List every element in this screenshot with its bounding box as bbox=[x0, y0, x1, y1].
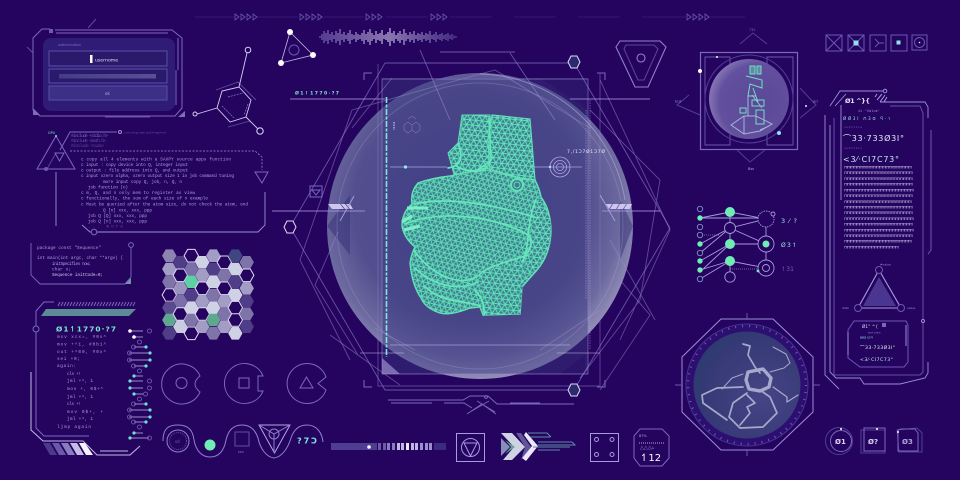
right data panel: it 'Value' bbox=[858, 109, 880, 114]
square bbox=[235, 432, 249, 446]
icon: circle with notch and square bbox=[224, 364, 263, 404]
heart body bbox=[402, 168, 551, 315]
triangle diagram bbox=[842, 262, 915, 312]
paragraph lines: mmmmmmmmmmmmmmmmmmmmmmm bbox=[844, 177, 913, 182]
hexagon node: left bbox=[284, 221, 296, 233]
heading labels: Ø1↿1770·?7 bbox=[295, 90, 339, 96]
bottom-right badge: 03: Ø3 bbox=[902, 438, 913, 446]
central holographic sphere: 7,/1Ɔ7Ø1Ɔ7Ø bbox=[567, 148, 605, 155]
assembly panel: ljmp again bbox=[57, 425, 91, 430]
code panel: c m, Q, and n only mem to register as view bbox=[81, 191, 195, 196]
bottom wave toolbar: ccc bbox=[238, 450, 244, 454]
login row: username: usernɑme bbox=[95, 58, 118, 64]
small triangle box bbox=[310, 186, 322, 197]
top arrow rows bbox=[195, 14, 745, 20]
code panel: job Q [n] xxx, xxx, ppp bbox=[88, 220, 147, 224]
direction labels bbox=[675, 28, 818, 171]
assembly panel: again: bbox=[57, 364, 76, 369]
paragraph lines: mmmmmmmmmmmmmmmmmmmmmmm bbox=[844, 171, 913, 176]
status card: △△△▵ bbox=[640, 445, 655, 451]
paragraph lines bbox=[844, 166, 914, 250]
code panel: more input copy Q, job, n, Q, n bbox=[103, 180, 182, 185]
assembly panel: mov +, 0$+^ bbox=[67, 387, 103, 392]
icon: four circle box bbox=[590, 434, 618, 462]
hexagon node: top right bbox=[568, 56, 580, 68]
status card bbox=[634, 429, 669, 466]
specimen model bbox=[731, 66, 772, 134]
assembly panel: jml +^, 1 bbox=[67, 417, 93, 422]
code panel: GPU bbox=[48, 131, 56, 135]
code panel: c Must be queried after the atom size, do not check the atom, end bbox=[81, 202, 248, 208]
axis lines bbox=[272, 99, 660, 211]
slider bar bbox=[331, 443, 446, 450]
right data panel: ØØ3I ᕬ3ᕮ ꟼ·↿ bbox=[843, 116, 891, 121]
code panel: #include <stdio.h> bbox=[71, 134, 108, 139]
vessels bbox=[448, 115, 492, 178]
login row: username bbox=[49, 51, 167, 66]
bottom-right badge: 02 bbox=[861, 428, 885, 453]
mini panel: text value bbox=[868, 330, 881, 334]
dna strand bbox=[128, 329, 152, 440]
login row: password bbox=[49, 69, 167, 83]
small code panel: package const "Sequence" bbox=[37, 246, 101, 251]
mini panel: Ø1° ^{ bbox=[862, 324, 878, 329]
small code panel: int main(int argc, char **argv) { bbox=[37, 256, 123, 261]
paragraph lines: mmmmmmmmmmmmmmmmmmmmmmm bbox=[844, 206, 913, 210]
assembly panel: sei +0; bbox=[57, 357, 80, 362]
small code panel: char x; bbox=[52, 268, 71, 272]
right hatch bbox=[606, 204, 632, 209]
sphere specimen widget bbox=[675, 28, 818, 171]
small code panel bbox=[31, 243, 133, 284]
chevron arrows bbox=[501, 432, 575, 461]
neural network bbox=[697, 206, 797, 282]
assembly panel: mov 0$+, + bbox=[67, 410, 103, 415]
neural network: ↿31 bbox=[781, 266, 794, 273]
bottom-right badge: 01: Ø1 bbox=[835, 438, 846, 446]
bottom-right badge: 03 bbox=[897, 428, 922, 452]
paragraph lines: mmmmmmmmmmmmmmmmmmmmmmm bbox=[844, 200, 912, 205]
right data panel bbox=[825, 89, 931, 389]
heading: Ø1↿1770·?7 bbox=[56, 324, 116, 334]
target rings bbox=[550, 157, 570, 177]
code panel: Q [n] xxx, xxx, ppp bbox=[103, 208, 152, 214]
top-right icon row bbox=[826, 35, 927, 51]
hexagon node: bottom right bbox=[568, 384, 580, 396]
small code panel: Sequence initCode=0; bbox=[52, 273, 103, 278]
teal header bar bbox=[41, 309, 136, 316]
paragraph lines: mmmmmmmmmmmmmmmmmmmmmmm bbox=[844, 166, 912, 170]
code panel: #include <cuda> bbox=[71, 144, 104, 149]
wireframe polygons bbox=[290, 50, 670, 390]
code panel bbox=[37, 130, 268, 235]
assembly panel: jml +^, 1 bbox=[67, 395, 93, 400]
mint dot bbox=[204, 440, 216, 450]
paragraph lines: mmmmmmmmmmmmmmmmmmmmmmm bbox=[844, 188, 914, 194]
status card: ↿12 bbox=[640, 453, 661, 464]
code panel: c output : file address into Q, and output bbox=[81, 168, 188, 174]
code panel: including new and fragment bbox=[124, 130, 167, 134]
code panel: ... more bbox=[88, 224, 123, 230]
corner brackets bbox=[364, 73, 605, 387]
stripe corner bbox=[43, 443, 93, 455]
shield triangle bbox=[259, 425, 290, 453]
right data panel: subtitle bbox=[844, 146, 862, 150]
waveform bbox=[320, 28, 456, 46]
right data panel: <3⁄·CI7C73° bbox=[843, 155, 899, 164]
icon: triangle in square bbox=[456, 434, 484, 462]
right data panel: subtitle bbox=[844, 125, 862, 129]
code panel: c input : copy device into Q, integer input bbox=[81, 163, 188, 168]
direction labels: pcl bbox=[813, 100, 818, 104]
mini panel bbox=[848, 321, 908, 367]
neural network: 3⁄? bbox=[781, 217, 797, 225]
icon: circle with notch and triangle bbox=[287, 363, 326, 404]
mini panel: <3⁄·CI7C73° bbox=[860, 357, 893, 363]
label: ?7Ɔ bbox=[297, 436, 317, 446]
dial: sd bbox=[175, 439, 180, 444]
login panel bbox=[27, 19, 185, 117]
paragraph lines: mmmmmmmmmmmmmmmmmmmmmmm bbox=[844, 228, 914, 234]
sphere body bbox=[327, 73, 633, 379]
heart wireframe bbox=[402, 115, 551, 315]
paragraph lines: mmmmmmmmmmmmmmmmmm bbox=[844, 246, 899, 250]
left hatch bbox=[328, 204, 353, 209]
paragraph lines: mmmmmmmmmmmmmmmmmmmmmmm bbox=[844, 234, 913, 239]
paragraph lines: mmmmmmmmmmmmmmmmmmmmmmm bbox=[844, 194, 913, 199]
assembly panel bbox=[31, 302, 140, 455]
triangle diagram: data bbox=[842, 306, 849, 310]
login panel: authentication bbox=[58, 43, 81, 47]
icon: circle with notch and circle bbox=[162, 364, 200, 404]
screen rectangle bbox=[382, 78, 588, 374]
right data panel: ⌒33·733Ø3I° bbox=[843, 133, 904, 143]
login row: button: ok bbox=[105, 91, 110, 96]
code panel: c functionally, the sum of each size of n example bbox=[81, 196, 208, 202]
code panel: c copy all 4 elements with a SAXPY source apps function bbox=[81, 158, 231, 162]
login row: button bbox=[49, 86, 167, 100]
starfish bbox=[702, 344, 798, 428]
assembly panel: out +^00, #0x^ bbox=[57, 350, 106, 355]
triangle node icon bbox=[278, 29, 316, 66]
assembly panel: cls +! bbox=[67, 372, 81, 377]
status card: 87% bbox=[639, 434, 647, 438]
paragraph lines: mmmmmmmmmmmmmmmmmmmmmmm bbox=[844, 211, 913, 216]
neural network: Ø3↿ bbox=[781, 242, 797, 249]
triangle emblem bbox=[37, 135, 75, 170]
panel header: Ø1 ^}{ bbox=[845, 97, 870, 105]
assembly panel: jml +^, 1 bbox=[67, 379, 93, 384]
assembly panel: mov xcx=, #0x^ bbox=[57, 335, 106, 340]
triangle diagram: #value bbox=[880, 262, 891, 266]
code panel: #include <math.h> bbox=[71, 139, 106, 144]
bottom-right badge: 01 bbox=[826, 428, 852, 454]
code panel: c input xzero alpha, xzero output size 1 in job command tuning bbox=[81, 174, 234, 179]
tri-shape emblem bbox=[616, 41, 666, 87]
hexagon grid bbox=[162, 249, 254, 340]
molecule bbox=[193, 47, 263, 134]
small code panel: initSpecifies now; bbox=[52, 262, 91, 267]
paragraph lines: mmmmmmmmmmmmmmmmmmmmmmm bbox=[844, 223, 913, 228]
direction labels: 732 bbox=[749, 28, 755, 32]
octagon starfish widget bbox=[675, 313, 820, 456]
bottom wave toolbar bbox=[163, 425, 323, 458]
dial bbox=[167, 430, 189, 452]
code panel: job Q [Q] xxx, xxx, ppp bbox=[88, 214, 147, 219]
code panel: job function (n) bbox=[88, 186, 128, 190]
central holographic sphere bbox=[272, 50, 670, 396]
assembly panel: mov +^1, #0b1^ bbox=[57, 342, 106, 348]
mini panel: ⌒33·733Ø3I° bbox=[860, 344, 895, 351]
ridges bbox=[405, 118, 537, 315]
hatch bar bbox=[58, 302, 135, 306]
faint molecule bbox=[394, 116, 420, 133]
direction labels: Bɪv bbox=[748, 166, 755, 171]
mini panel: ØØ3I ᕬ3 ꟼ bbox=[860, 334, 873, 340]
paragraph lines: mmmmmmmmmmmmmmmmmmmmmmm bbox=[844, 240, 912, 244]
bottom center ornament bbox=[388, 396, 574, 414]
paragraph lines: mmmmmmmmmmmmmmmmmmmmmmm bbox=[844, 217, 914, 222]
triangle diagram: value bbox=[907, 306, 915, 310]
direction labels: bcd bbox=[675, 100, 681, 104]
paragraph lines: mmmmmmmmmmmmmmmmmmmmmmm bbox=[844, 183, 913, 188]
bottom-right badge: 02: Ø? bbox=[868, 438, 878, 446]
mint dashed scale bbox=[386, 97, 388, 357]
assembly panel: cls +! bbox=[67, 402, 81, 407]
